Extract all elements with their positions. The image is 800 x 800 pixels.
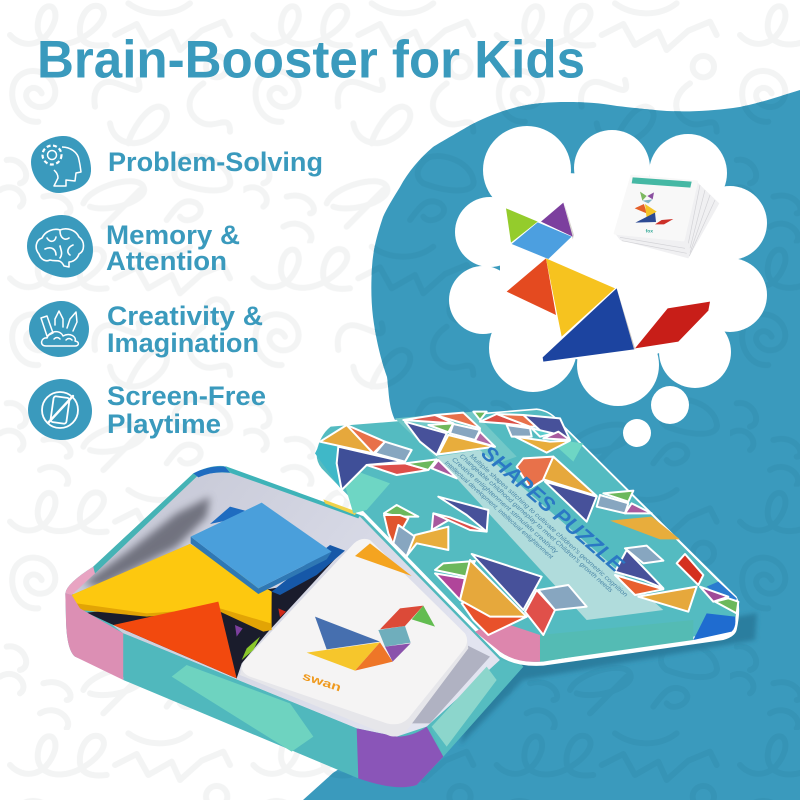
icon: art tools on cloud <box>29 301 89 357</box>
shadow <box>460 613 757 745</box>
blue background blob <box>303 90 800 800</box>
far blue piece <box>210 507 245 524</box>
label: Creativity & <box>107 301 263 331</box>
lid description: Creative enlightenment stimulate creativity <box>450 456 560 556</box>
swan tangram on card <box>307 543 435 671</box>
shaded gap beside card <box>407 643 490 723</box>
mint patches <box>343 442 583 513</box>
label: Screen-Free <box>107 381 266 411</box>
card deck: fox <box>646 229 653 235</box>
thought bubble: large dot <box>651 386 689 424</box>
purple corner <box>357 727 443 787</box>
small mixed pieces <box>235 625 243 637</box>
card thickness <box>240 637 468 736</box>
icon: brain <box>27 215 93 277</box>
red triangle piece <box>113 602 237 678</box>
lid description: Multiple shapes stitching to cultivate children's geometric cognition <box>468 453 629 599</box>
label: Problem-Solving <box>108 147 323 177</box>
light strip <box>395 412 517 478</box>
benefit: screen-free playtime <box>28 379 266 440</box>
label band <box>437 450 663 620</box>
tangram cat <box>506 203 710 362</box>
thought cloud <box>449 126 767 406</box>
tin base <box>65 466 757 787</box>
lid shell <box>315 408 739 666</box>
right wall <box>430 660 523 757</box>
label: Imagination <box>107 328 259 358</box>
pink wall <box>65 593 123 680</box>
top rim <box>93 473 197 573</box>
card label: swan: swan <box>301 671 343 694</box>
title: Brain-Booster for Kids <box>37 30 585 90</box>
label: Attention <box>106 246 227 276</box>
lid side band <box>475 582 737 662</box>
benefit: creativity and imagination <box>29 301 263 358</box>
thought bubble: small dot <box>623 419 651 447</box>
tangram decals <box>315 412 738 635</box>
benefit: memory and attention <box>27 215 240 277</box>
label: Memory & <box>106 220 240 250</box>
blue square piece <box>191 503 332 594</box>
activity card <box>242 539 467 724</box>
benefit: problem-solving <box>31 136 323 193</box>
icon: no phone <box>28 379 92 440</box>
tin lid <box>315 408 739 666</box>
lid title: SHAPES PUZZLE <box>477 441 628 578</box>
interior <box>72 472 500 737</box>
lid description: Intellectual development, intellectual enlightenment <box>443 460 554 561</box>
label: Playtime <box>107 409 221 439</box>
interior reflection <box>83 497 210 587</box>
icon: head with gear <box>31 136 91 193</box>
teal front wall <box>123 633 358 778</box>
dark cavity <box>87 550 343 678</box>
card deck <box>615 176 719 258</box>
tin outer shell <box>65 466 523 787</box>
lid description: Changeable childhood gameplay to meet Children's growth needs <box>458 453 614 595</box>
mint patch <box>172 665 313 752</box>
yellow tangram piece <box>72 544 272 632</box>
lid description <box>443 453 629 599</box>
